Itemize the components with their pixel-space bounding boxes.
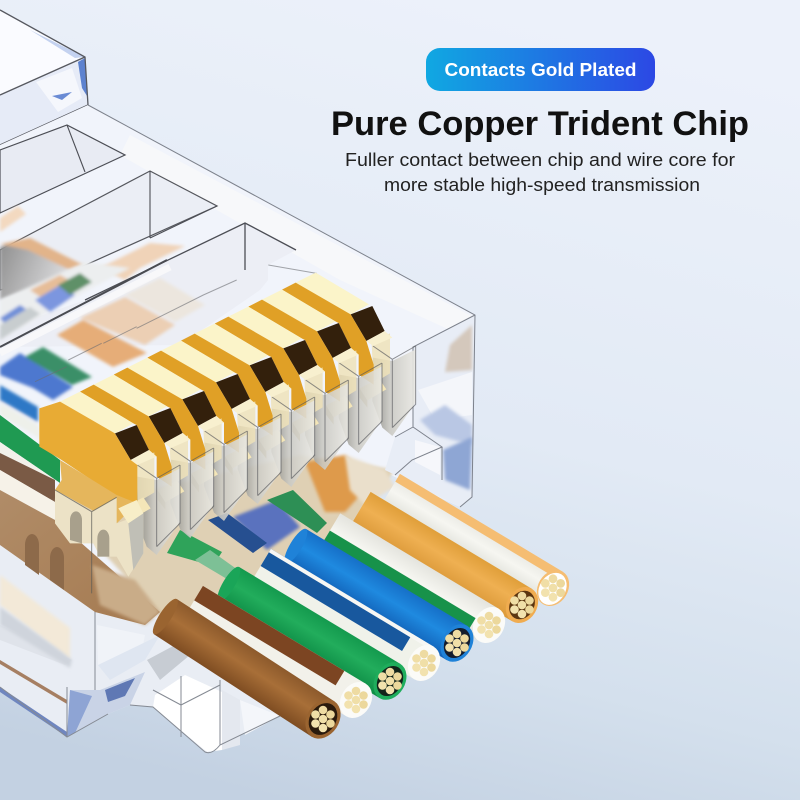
orange core area xyxy=(305,455,372,512)
cavity one xyxy=(0,125,125,213)
wire: blue xyxy=(280,526,482,669)
wire: brown xyxy=(149,596,349,746)
brown band seen through plug xyxy=(0,490,160,625)
wire: white with brown stripe xyxy=(183,586,380,725)
blue core area xyxy=(233,500,300,550)
cavity three xyxy=(0,223,296,347)
connector plug body xyxy=(0,10,475,753)
main top surface xyxy=(0,105,475,700)
top rear block xyxy=(0,10,88,145)
green wire left xyxy=(0,415,60,483)
big front gold face xyxy=(39,402,137,503)
wire: white with orange stripe xyxy=(380,474,578,613)
right transparent end xyxy=(88,105,475,507)
stripes seen through the plug xyxy=(0,262,130,340)
interior reflections xyxy=(0,206,185,300)
badge: Contacts Gold Plated: Contacts Gold Plated xyxy=(444,59,636,80)
lower gold face xyxy=(39,447,137,523)
top edge sheen xyxy=(120,135,475,330)
front arches xyxy=(55,490,143,593)
description: Fuller contact between chip and wire core for xyxy=(345,150,735,170)
white wire left xyxy=(0,470,55,520)
dark blue core area xyxy=(208,513,267,553)
lower transparent body xyxy=(0,545,280,753)
lower green core area xyxy=(167,530,222,566)
brown wire left xyxy=(0,453,55,502)
description: more stable high-speed transmission xyxy=(384,175,700,195)
wire: green xyxy=(213,564,415,707)
green core area xyxy=(267,490,327,533)
title: Pure Copper Trident Chip xyxy=(331,105,749,143)
badge: Contacts Gold Plated xyxy=(426,48,655,91)
small rear wire boxes xyxy=(35,265,317,382)
wire: white with blue stripe xyxy=(251,549,448,688)
gold plated trident chips xyxy=(35,265,416,593)
wire: orange xyxy=(351,492,546,630)
coloured reflections xyxy=(0,278,205,440)
beige area under chips xyxy=(55,455,395,620)
white core area xyxy=(345,455,395,505)
cavity two xyxy=(0,171,217,290)
wires xyxy=(149,474,578,746)
wire: white with green stripe xyxy=(321,513,513,650)
long edge xyxy=(0,260,167,347)
description xyxy=(345,150,735,195)
